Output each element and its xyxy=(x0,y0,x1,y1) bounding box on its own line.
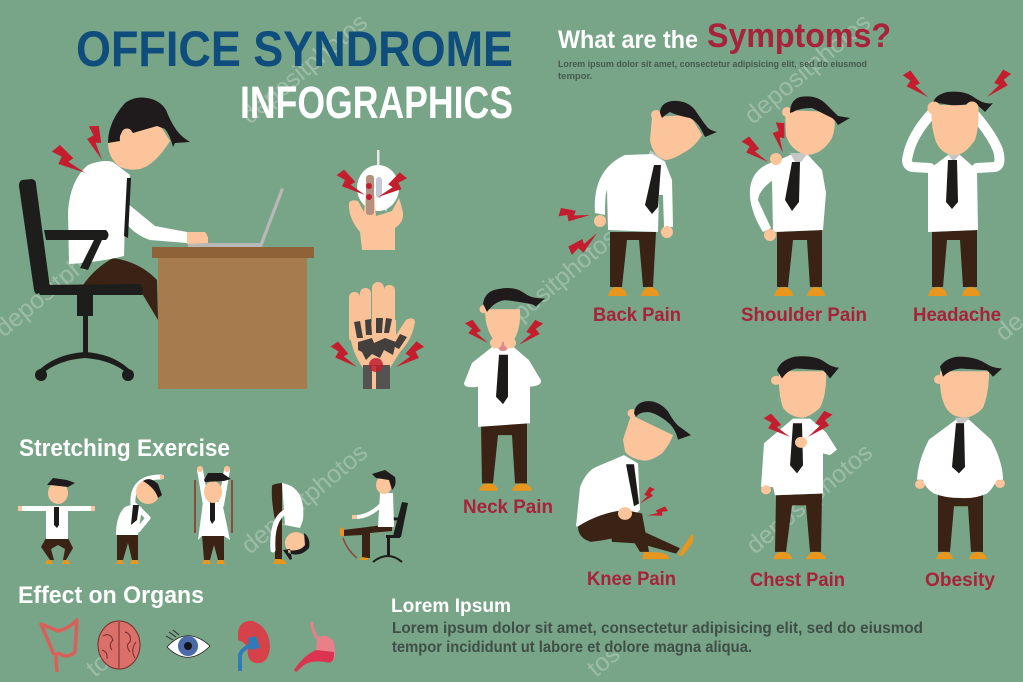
chair back and base xyxy=(19,179,134,381)
organ: stomach xyxy=(294,622,335,672)
icon: hand with wrist bones xyxy=(327,282,428,389)
text block: lorem ipsum: Lorem ipsum dolor sit amet, consectetur adipisicing elit, sed do eiusmod xyxy=(392,620,923,637)
laptop xyxy=(188,188,284,247)
heading: stretching exercise: Stretching Exercise xyxy=(19,435,230,462)
figure: shoulder pain xyxy=(738,96,850,296)
label: headache: Headache xyxy=(913,305,1001,326)
figure: chest pain xyxy=(760,356,839,559)
exercise: seated leg raise xyxy=(340,470,408,562)
watermarks: depositphotos xyxy=(486,223,623,345)
heading: symptoms xyxy=(558,17,891,55)
trousers xyxy=(83,258,158,320)
figure: neck pain xyxy=(461,288,547,491)
title: INFOGRAPHICS xyxy=(240,77,513,128)
watermarks: depositphotos xyxy=(741,438,878,560)
shirt xyxy=(68,161,187,264)
desk xyxy=(158,258,307,389)
label: knee pain: Knee Pain xyxy=(587,569,676,590)
heading: symptoms: What are the xyxy=(558,26,698,54)
heading: symptoms: Symptoms? xyxy=(707,17,891,55)
symptoms intro text xyxy=(558,59,867,82)
figure: knee pain xyxy=(576,401,693,559)
chair arm and seat xyxy=(35,230,143,295)
head xyxy=(108,125,170,170)
figure: back pain xyxy=(559,101,717,296)
text block: lorem ipsum: Lorem Ipsum xyxy=(391,596,511,617)
watermarks: tos xyxy=(81,640,124,682)
organ: kidney xyxy=(238,621,270,671)
icon: hand on mouse xyxy=(333,150,410,250)
label: back pain: Back Pain xyxy=(593,305,681,326)
exercise: forward bend xyxy=(272,483,309,564)
exercise: side bend xyxy=(116,475,164,564)
label: shoulder pain: Shoulder Pain xyxy=(741,305,867,326)
text block: lorem ipsum: tempor incididunt ut labore et dolore magna aliqua. xyxy=(392,639,752,656)
organ: brain xyxy=(98,621,140,669)
exercise: arms up with bands xyxy=(194,466,233,564)
watermarks: depositphotos xyxy=(236,8,373,130)
main illustration: man at desk xyxy=(19,98,314,389)
heading: effect on organs: Effect on Organs xyxy=(18,582,204,609)
symptoms intro text: tempor. xyxy=(558,71,592,82)
figure: headache xyxy=(899,68,1015,296)
label: neck pain: Neck Pain xyxy=(463,497,553,518)
text block: lorem ipsum xyxy=(391,596,923,656)
label: obesity: Obesity xyxy=(925,570,995,591)
exercise: arms out squat xyxy=(18,478,95,564)
figure: obesity xyxy=(915,357,1005,559)
title: OFFICE SYNDROME xyxy=(76,21,513,77)
pain bolts xyxy=(48,143,90,179)
watermarks: depositphotos xyxy=(739,8,876,130)
organ: eye xyxy=(166,630,210,657)
watermarks: tos xyxy=(582,640,625,682)
symptoms intro text: Lorem ipsum dolor sit amet, consectetur adipisicing elit, sed do eiusmod xyxy=(558,59,867,70)
label: chest pain: Chest Pain xyxy=(750,570,845,591)
watermarks: depositphotos xyxy=(236,438,373,560)
organ: colon xyxy=(41,620,77,672)
title xyxy=(76,21,513,128)
